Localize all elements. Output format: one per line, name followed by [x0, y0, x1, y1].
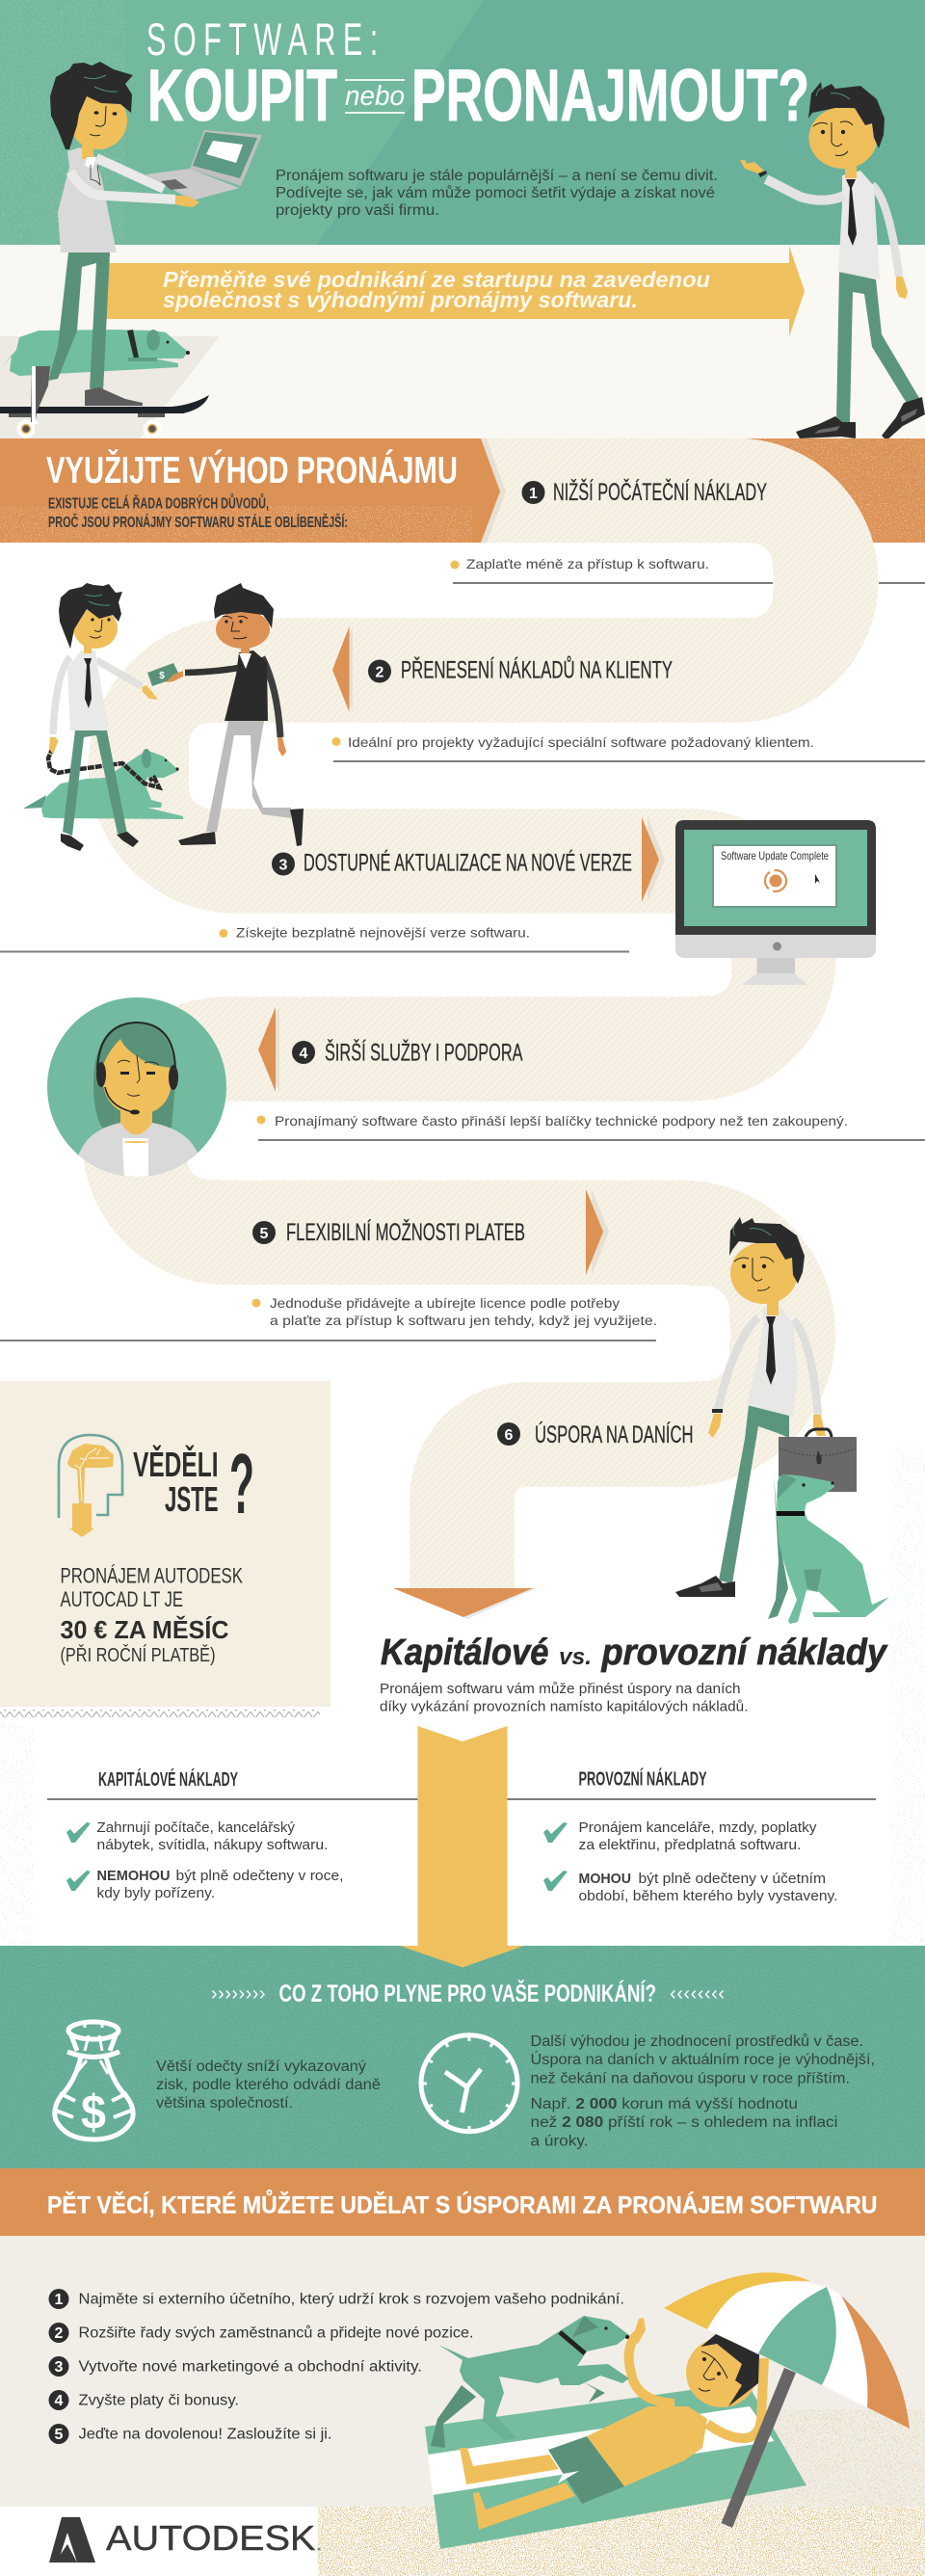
road section heading banner: VYUŽIJTE VÝHOD PRONÁJMU: [46, 449, 458, 491]
did you know panel: PRONÁJEM AUTODESK: [60, 1563, 243, 1588]
illustration: sunbather, dog and umbrella: [425, 2272, 910, 2549]
clock text: Další výhodou je zhodnocení prostředků v čase.: [530, 2033, 863, 2050]
step 3: 3: [279, 858, 288, 873]
beach ground panel: [0, 2236, 925, 2576]
clock text: Úspora na daních v aktuálním roce je výhodnější,: [530, 2052, 875, 2068]
did you know panel: (PŘI ROČNÍ PLATBĚ): [60, 1644, 216, 1666]
step 1: [451, 478, 767, 571]
did you know panel: 30 € ZA MĚSÍC: [60, 1615, 229, 1644]
Autodesk logo: AUTODESK: [106, 2518, 316, 2558]
orange banner background: [0, 438, 925, 543]
step 6: 6: [505, 1427, 514, 1444]
step 5: Jednoduše přidávejte a ubírejte licence podle potřeby: [270, 1295, 620, 1311]
step 1: 1: [529, 486, 538, 502]
illustration: two men and dog handing over money: $: [159, 671, 165, 681]
column: capital costs: NEMOHOU: [96, 1868, 170, 1884]
did you know panel: AUTOCAD LT JE: [60, 1587, 183, 1611]
illustration: businessman gesturing: [740, 82, 925, 440]
step 2: Ideální pro projekty vyžadující speciální software požadovaný klientem.: [348, 734, 814, 750]
illustration: monitor with update dialog: [675, 820, 876, 985]
title: [146, 14, 809, 137]
column: capital costs: nábytek, svítidla, nákupy softwaru.: [96, 1837, 328, 1853]
step 1: NIŽŠÍ POČÁTEČNÍ NÁKLADY: [553, 478, 767, 506]
column: operating costs: Pronájem kanceláře, mzdy, poplatky: [578, 1819, 817, 1836]
column: operating costs: za elektřinu, předplatná softwaru.: [578, 1837, 802, 1853]
step 4: [256, 1007, 848, 1129]
illustration: headset agent portrait: [47, 997, 226, 1181]
separator lines: [0, 582, 925, 1341]
road section heading banner: [0, 438, 506, 543]
step 2: PŘENESENÍ NÁKLADŮ NA KLIENTY: [401, 653, 673, 684]
clock text: a úroky.: [530, 2134, 588, 2149]
icon: brain head: [59, 1435, 122, 1537]
clock text: než 2 080 příští rok – s ohledem na inflaci: [530, 2114, 838, 2131]
column: capital costs: Zahrnují počítače, kancelářský: [96, 1819, 295, 1836]
column: capital costs: kdy byly pořízeny.: [96, 1885, 215, 1901]
step 3: DOSTUPNÉ AKTUALIZACE NA NOVÉ VERZE: [304, 848, 632, 877]
header cream ground: [0, 245, 925, 438]
orange band: five things: [0, 2168, 925, 2236]
did you know panel: VĚDĚLI: [133, 1444, 218, 1484]
step 5: a plaťte za přístup k softwaru jen tehdy, když jej využijete.: [270, 1313, 657, 1328]
did you know panel: [0, 1381, 330, 1717]
step 6: ÚSPORA NA DANÍCH: [535, 1421, 694, 1448]
list of five things: Jeďte na dovolenou! Zasloužíte si ji.: [79, 2427, 331, 2442]
icon: money bag: $: [81, 2085, 106, 2139]
list of five things: Vytvořte nové marketingové a obchodní aktivity.: [79, 2359, 422, 2375]
step 5: [252, 1189, 657, 1328]
road section heading banner: PROČ JSOU PRONÁJMY SOFTWARU STÁLE OBLÍBENĚJŠÍ:: [48, 513, 348, 531]
step 4: ŠIRŠÍ SLUŽBY I PODPORA: [325, 1039, 523, 1066]
title: nebo: [345, 81, 405, 112]
intro text: Pronájem softwaru je stále populárnější – a není se čemu divit.: [276, 168, 718, 184]
Autodesk logo: [49, 2517, 320, 2563]
road section heading banner: EXISTUJE CELÁ ŘADA DOBRÝCH DŮVODŮ,: [48, 493, 269, 513]
column: operating costs: být plně odečteny v účetním: [638, 1871, 826, 1887]
title: KOUPIT: [147, 55, 337, 137]
money bag text: Větší odečty sníží vykazovaný: [156, 2058, 366, 2075]
down arrow of road: [393, 1588, 537, 1619]
intro text: [276, 168, 718, 219]
side speckle texture: [0, 1446, 925, 1946]
icon: money bag: [55, 2022, 133, 2139]
list of five things: Zvyšte platy či bonusy.: [79, 2392, 239, 2409]
list of five things: Rozšiřte řady svých zaměstnanců a přidejte nové pozice.: [79, 2324, 474, 2342]
big yellow down arrow: [400, 1726, 524, 1968]
step 2: 2: [376, 665, 384, 680]
money bag text: většina společností.: [156, 2095, 293, 2111]
icon: clock: [419, 2033, 519, 2134]
money bag text: [156, 2058, 381, 2111]
column: capital costs: KAPITÁLOVÉ NÁKLADY: [98, 1768, 238, 1791]
heading: capital vs operating costs: vs.: [559, 1644, 592, 1670]
list of five things: 3: [55, 2359, 64, 2376]
step 2: [331, 626, 814, 750]
illustration: businessman with briefcase and dog: [675, 1217, 889, 1624]
list of five things: 2: [55, 2325, 64, 2342]
step 5: 5: [260, 1226, 269, 1242]
list of five things: 5: [55, 2427, 64, 2443]
did you know panel: ?: [229, 1436, 254, 1531]
costs intro text: [380, 1681, 748, 1715]
heading: capital vs operating costs: [381, 1633, 888, 1673]
heading: capital vs operating costs: provozní náklady: [601, 1633, 888, 1673]
column: capital costs: být plně odečteny v roce,: [175, 1868, 343, 1884]
step 1: Zaplaťte méně za přístup k softwaru.: [466, 556, 709, 571]
heading: what it means: CO Z TOHO PLYNE PRO VAŠE PODNIKÁNÍ?: [279, 1978, 656, 2007]
illustration: monitor with update dialog: Software Update Complete: [721, 849, 829, 863]
title: SOFTWARE:: [146, 14, 385, 66]
yellow arrow banner: Přeměňte své podnikání ze startupu na zavedenou: [163, 267, 710, 292]
green results panel: [0, 1946, 925, 2169]
yellow arrow banner: [106, 246, 805, 336]
list of five things: Najměte si externího účetního, který udrží krok s rozvojem vašeho podnikání.: [79, 2292, 624, 2307]
column: operating costs: PROVOZNÍ NÁKLADY: [578, 1767, 707, 1791]
illustration: skateboarder with laptop and dog: [0, 62, 262, 438]
heading: capital vs operating costs: Kapitálové: [381, 1633, 549, 1673]
step 6: [497, 1421, 694, 1448]
costs intro text: díky vykázání provozních namísto kapitálových nákladů.: [380, 1698, 748, 1715]
did you know panel: JSTE: [165, 1479, 218, 1519]
step 5: FLEXIBILNÍ MOŽNOSTI PLATEB: [286, 1218, 525, 1246]
step 3: [220, 817, 665, 941]
yellow arrow banner: společnost s výhodnými pronájmy softwaru.: [163, 287, 638, 312]
step 3: Získejte bezplatně nejnovější verze softwaru.: [236, 925, 530, 941]
heading: what it means: ››››››››: [211, 1983, 266, 2005]
comparison column rule: [47, 1798, 876, 1800]
column: operating costs: období, během kterého byly vystaveny.: [578, 1888, 838, 1904]
column: operating costs: MOHOU: [578, 1871, 631, 1887]
list of five things: 4: [55, 2393, 64, 2409]
clock text: než čekání na daňovou úsporu v roce příštím.: [530, 2070, 850, 2087]
column: operating costs: [543, 1767, 838, 1904]
illustration: two men and dog handing over money: [23, 583, 304, 851]
list of five things: 1: [55, 2292, 64, 2308]
clock text: [530, 2033, 875, 2149]
step 4: 4: [300, 1046, 308, 1062]
winding cream road: [135, 491, 826, 1588]
column: capital costs: [66, 1768, 343, 1901]
clock text: Např. 2 000 korun má vyšší hodnotu: [530, 2096, 798, 2112]
costs intro text: Pronájem softwaru vám může přinést úspory na daních: [380, 1681, 740, 1697]
money bag text: zisk, podle kterého odvádí daně: [156, 2077, 381, 2093]
step 4: Pronajímaný software často přináší lepší balíčky technické podpory než ten zakoupený.: [275, 1113, 848, 1129]
heading: what it means: ‹‹‹‹‹‹‹‹: [670, 1983, 725, 2005]
intro text: projekty pro vaši firmu.: [276, 202, 439, 219]
intro text: Podívejte se, jak vám může pomoci šetřit výdaje a získat nové: [276, 185, 715, 201]
list of five things: [48, 2289, 624, 2444]
header green panel: [0, 0, 925, 246]
orange band: five things: PĚT VĚCÍ, KTERÉ MŮŽETE UDĚLAT S ÚSPORAMI ZA PRONÁJEM SOFTWARU: [47, 2188, 877, 2218]
white notches between road bands: [0, 544, 925, 1381]
